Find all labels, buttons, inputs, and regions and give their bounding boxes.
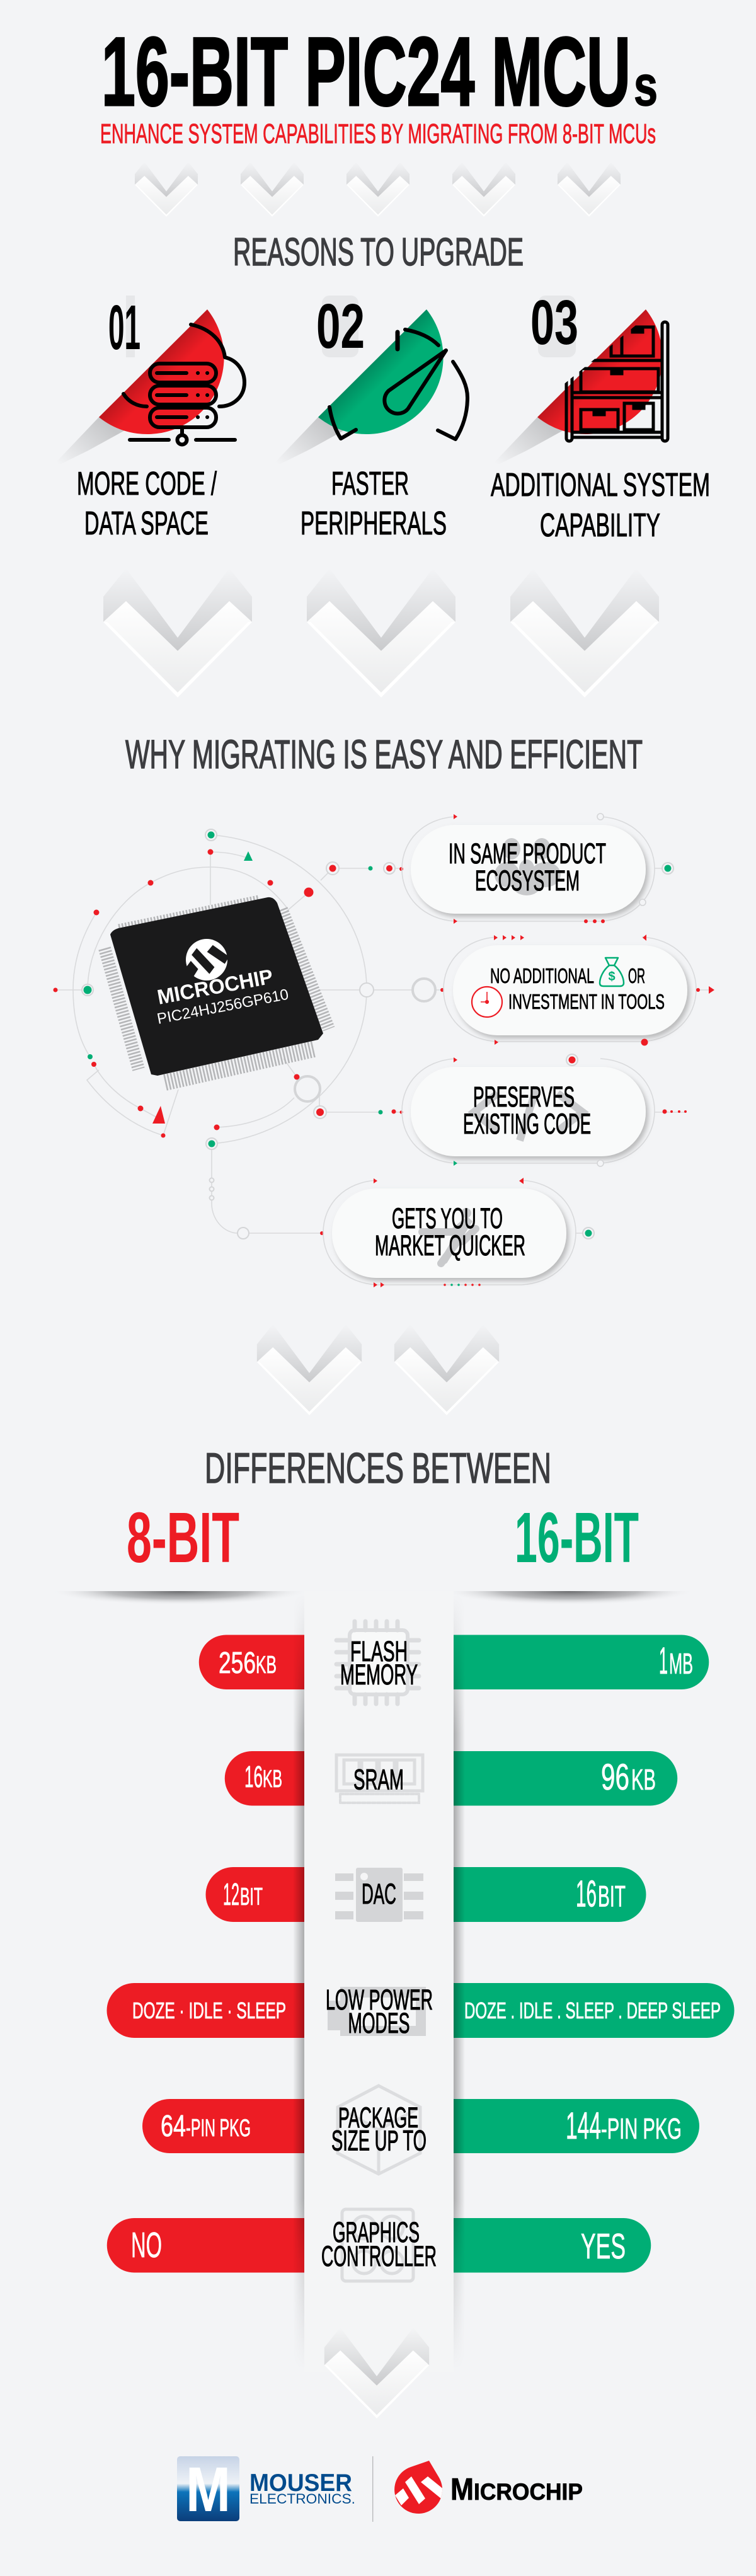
red half disc — [537, 309, 663, 434]
chevron: bottom arrow — [324, 2327, 429, 2418]
icon: battery (ghost) — [328, 1987, 426, 2036]
label: more code / data space — [77, 466, 217, 542]
value: 16-bit: BIT — [598, 1879, 626, 1913]
panel: reason 01: 01 — [108, 292, 140, 363]
icon: code brackets (ghost) — [474, 1087, 583, 1141]
fold shadow — [487, 417, 564, 470]
icon: memory module (ghost) — [336, 1755, 423, 1803]
centre column — [293, 1591, 465, 2372]
ghost numeral — [126, 296, 135, 357]
panel: gets you to market quicker: MARKET QUICKER — [375, 1229, 525, 1262]
label: more code / data space: DATA SPACE — [84, 505, 209, 542]
ghost numeral — [322, 296, 358, 357]
panel: in same product ecosystem — [402, 814, 655, 924]
panel: no additional money or time: OR — [628, 964, 645, 987]
row: low power modes: MODES — [348, 2007, 410, 2039]
frame markers — [454, 1056, 687, 1166]
icon: package box (ghost) — [338, 2086, 420, 2174]
row: package size: SIZE UP TO — [331, 2125, 427, 2156]
label: faster peripherals — [301, 466, 447, 542]
number 03: 03 — [530, 287, 578, 358]
pill text: PRESERVES — [473, 1081, 575, 1113]
label: additional system capability: CAPABILITY — [540, 507, 660, 544]
number 02: 02 — [316, 291, 365, 362]
fold shadow — [268, 417, 345, 470]
row: package size — [161, 2086, 682, 2174]
microchip emblem — [394, 2461, 447, 2514]
icon: money bag: $ — [608, 970, 616, 984]
logo: mouser electronics: M — [186, 2454, 231, 2525]
row: sram — [244, 1755, 656, 1803]
row: low power modes — [132, 1984, 721, 2039]
icon: clock — [472, 987, 502, 1017]
row label: GRAPHICS — [333, 2216, 420, 2248]
microchip package — [105, 897, 329, 1083]
panel: preserves existing code — [402, 1056, 687, 1166]
panel: no additional money or time — [444, 934, 714, 1046]
heading: differences between: DIFFERENCES BETWEEN — [205, 1444, 551, 1492]
logo: mouser electronics — [177, 2454, 355, 2525]
row label: LOW POWER — [326, 1984, 433, 2016]
label: more code / data space: MORE CODE / — [77, 466, 217, 502]
chip brand text: MICROCHIP — [156, 965, 275, 1009]
value: 8-bit: BIT — [240, 1883, 263, 1911]
icon: storage shelves — [566, 322, 668, 441]
panel: reason 01 — [49, 292, 244, 470]
ghost numeral — [538, 296, 576, 357]
value: 8-bit: KB — [263, 1766, 282, 1793]
pill text: NO ADDITIONAL — [490, 964, 594, 987]
mouser badge — [177, 2456, 239, 2521]
value: 8-bit: 12 — [223, 1878, 239, 1912]
red half disc — [99, 309, 224, 434]
frame markers — [374, 1178, 524, 1287]
row label: FLASH — [350, 1635, 408, 1667]
panel: gets you to market quicker — [323, 1178, 576, 1287]
chevron row: five small arrows — [135, 162, 621, 217]
icon: people (ghost) — [495, 838, 561, 895]
pill text: GETS YOU TO — [392, 1202, 503, 1234]
icon: display controller (ghost) — [342, 2209, 413, 2281]
chip body — [110, 897, 323, 1076]
logo divider — [372, 2456, 373, 2522]
circuit wires — [55, 835, 711, 1233]
label: additional system capability — [491, 467, 710, 544]
chevron row: three large arrows — [103, 568, 659, 698]
value: 8-bit: 256 — [219, 1647, 256, 1680]
panel: preserves existing code: EXISTING CODE — [463, 1108, 591, 1140]
value: 8-bit: KB — [256, 1652, 277, 1679]
value: 16-bit: 96 — [601, 1757, 629, 1798]
label: faster peripherals: FASTER — [331, 466, 409, 502]
value: 16-bit: KB — [631, 1763, 656, 1796]
header ledge shadow: 8-bit — [50, 1591, 309, 1619]
green half disc — [318, 309, 444, 434]
value: 8-bit: 16 — [244, 1761, 263, 1794]
value: 16-bit: 16 — [576, 1873, 597, 1914]
frame markers — [494, 934, 714, 1046]
chip pins — [105, 897, 329, 1083]
value: 8-bit: 64 — [161, 2110, 186, 2143]
row label: SRAM — [353, 1763, 404, 1796]
panel: reason 03 — [503, 296, 669, 460]
chevron row: two arrows — [257, 1324, 499, 1415]
icon: speed gauge — [329, 330, 467, 439]
value: 16-bit: -PIN PKG — [601, 2112, 682, 2145]
row label: PACKAGE — [338, 2102, 418, 2134]
bars: 16-bit side — [450, 1635, 735, 2272]
logo: microchip — [394, 2461, 583, 2514]
icon: cloud server — [123, 325, 244, 445]
row: dac — [223, 1868, 626, 1922]
icon: money bag — [600, 958, 624, 986]
microchip wordmark — [450, 2473, 583, 2507]
bars: 8-bit side — [107, 1635, 309, 2272]
value: 8-bit — [161, 2110, 251, 2143]
frame markers — [454, 814, 605, 924]
panel: in same product ecosystem: ECOSYSTEM — [475, 865, 580, 897]
icon: running figure (ghost) — [422, 1208, 476, 1263]
mouser wordmark: MOUSER — [249, 2470, 352, 2497]
microchip wordmark: ICROCHIP — [474, 2479, 583, 2505]
column header: 16-bit: 16-BIT — [515, 1498, 639, 1577]
heading: reasons to upgrade: REASONS TO UPGRADE — [233, 231, 524, 274]
value: 8-bit: DOZE · IDLE · SLEEP — [132, 1998, 286, 2023]
label: faster peripherals: PERIPHERALS — [301, 505, 447, 542]
microchip wordmark: M — [450, 2473, 474, 2507]
pill text: IN SAME PRODUCT — [449, 837, 606, 870]
panel: no additional money or time: INVESTMENT IN TOOLS — [508, 990, 665, 1013]
circuit nodes — [53, 829, 673, 1239]
icon: chip (ghost) — [336, 1621, 419, 1704]
fold shadow — [49, 417, 126, 470]
header ledge shadow: 16-bit — [444, 1591, 694, 1619]
title: s — [634, 55, 658, 118]
logo: mouser electronics: ELECTRONICS. — [249, 2491, 355, 2507]
value: 16-bit — [566, 2105, 682, 2147]
value: 16-bit: MB — [669, 1647, 693, 1680]
value: 16-bit: 1 — [659, 1640, 668, 1682]
row: flash memory: MEMORY — [340, 1659, 418, 1691]
value: 8-bit: -PIN PKG — [186, 2115, 251, 2142]
panel: reason 02 — [268, 291, 467, 470]
chip logo — [179, 935, 233, 985]
value: 8-bit: NO — [131, 2225, 162, 2265]
row: graphics controller: CONTROLLER — [321, 2240, 437, 2272]
column header: 8-bit: 8-BIT — [127, 1498, 239, 1577]
value: 16-bit — [659, 1640, 693, 1682]
row label: DAC — [362, 1878, 396, 1910]
row: flash memory — [219, 1621, 693, 1704]
value: 16-bit: YES — [581, 2226, 626, 2267]
icon: ic package (ghost) — [335, 1868, 423, 1922]
chip part number: PIC24HJ256GP610 — [156, 986, 290, 1028]
value: 16-bit: 144 — [566, 2105, 601, 2147]
row: graphics controller — [131, 2209, 626, 2281]
